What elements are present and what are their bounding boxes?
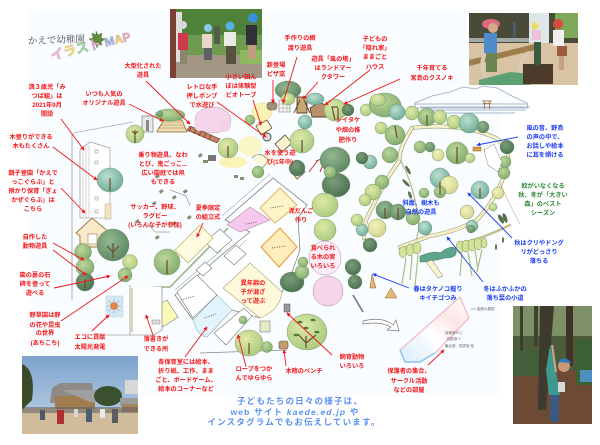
label: shiitake: や畑の推	[336, 126, 360, 134]
label: classroom corners: 折り紙、工作、まま	[158, 367, 214, 375]
gray tall lattice	[484, 144, 502, 172]
guardians room: 集会室・図書室 他	[445, 343, 474, 348]
blue and green labels	[402, 124, 568, 302]
forest paths	[364, 126, 520, 247]
label: soccer baseball rugby: サッカー、野球、	[130, 204, 180, 211]
label: parent-child clubs: 親子登園「かえで	[8, 170, 58, 177]
label: mixed age play: 子が混ざ	[241, 288, 266, 296]
label: rope swing: ロープをつか	[236, 366, 272, 373]
label: slope: 自然の遊具	[406, 208, 436, 216]
label: winter path: 落ち葉の小道	[486, 294, 524, 302]
pink tree	[194, 107, 231, 133]
label: hideout: ハウス	[366, 63, 384, 71]
label: winter path: 冬はふかふかの	[483, 286, 527, 293]
label: edible fruit: る木の実	[311, 253, 335, 261]
label: rope equipment: 手作りの綱	[285, 35, 315, 42]
label: rope equipment: 渡り遊具	[288, 44, 312, 52]
room: white classroom	[177, 275, 217, 318]
label: mixed age play: 異年齢の	[241, 280, 265, 287]
blue callout arrows	[373, 137, 518, 288]
label: spring bamboo shoots: キイチゴつみ	[419, 294, 457, 302]
label: wind tower: クタワー	[321, 73, 345, 81]
label: parent-child clubs: っこぐらぶ」と	[11, 179, 55, 186]
dark leaves	[401, 165, 509, 250]
left play yard outlines	[130, 285, 162, 335]
label: solar power: エコに貢献	[75, 334, 105, 341]
title	[28, 29, 132, 63]
footer message: 子どもたちの日々の様子は、	[237, 396, 363, 406]
label: wild grass garden: の世界	[36, 329, 55, 337]
label: guardians room: 保護者の集合、	[387, 368, 431, 375]
label: animals: 飼育動物	[340, 354, 364, 361]
room: small yellow	[153, 300, 178, 327]
gray house	[142, 116, 153, 132]
label: spring bamboo shoots: 春はタケノコ掘り	[413, 286, 463, 293]
label: climbing trees: 木もたくさん	[12, 142, 50, 150]
tan triangles	[370, 274, 397, 298]
gray arrow	[363, 319, 399, 331]
hideout house	[310, 102, 328, 117]
yellow patches	[252, 103, 272, 121]
main school building	[72, 122, 363, 353]
label: vehicles and jump rope: とび、鬼ごっこ...	[139, 160, 188, 168]
label: retro pump: で水遊び	[190, 101, 215, 109]
icon: maple leaf	[89, 31, 105, 48]
label: parent-child clubs: 預かり保育「ぎょ	[8, 187, 58, 195]
room notes: 保育室2Fに	[445, 330, 464, 335]
label: retro pump: 押しポンプ	[187, 92, 218, 100]
footer message: インスタグラムでもお伝えしています。	[207, 417, 381, 427]
bamboo grove	[370, 144, 509, 298]
label: bench: 木陰のベンチ	[285, 367, 323, 375]
label: summer pool: の組立式	[196, 213, 221, 221]
square frame	[290, 165, 305, 179]
label: classroom corners: 各保育室には絵本、	[158, 359, 214, 366]
west trees	[97, 168, 123, 192]
label: rope swing: んでゆらゆら	[236, 375, 272, 382]
room: yellow classroom	[260, 188, 297, 223]
label: vehicles and jump rope: 乗り物遊具、なわ	[138, 152, 188, 159]
hedge top	[275, 81, 301, 99]
swing	[309, 157, 327, 172]
label: Mitsuba class: 満３歳児「み	[28, 84, 66, 91]
edible fruit trees	[309, 241, 343, 306]
label: mud balls: 作り	[295, 216, 307, 224]
label: camphor tree: 千年育てる	[417, 65, 447, 72]
room: orange classroom	[261, 228, 297, 267]
large dark trees by the swings	[320, 147, 350, 173]
label: popular original equipment: オリジナル遊具	[82, 99, 126, 107]
label: graffiti place: 落書きが	[144, 336, 168, 343]
west building and hut	[76, 142, 111, 247]
mountain and torii: Miyajima	[414, 86, 530, 113]
label: shiitake: 肥作り	[339, 136, 357, 144]
label: biotope: 小さい田ん	[226, 74, 256, 81]
solar panel	[106, 296, 123, 317]
label: pizza oven: 新登場	[267, 62, 285, 69]
label: hideout: 「隠れ家」	[360, 44, 390, 52]
title: kindergarten name: かえで幼稚園	[28, 31, 85, 47]
label: forest sounds: に耳を傾ける	[526, 151, 564, 159]
label: self-made animal equipment: 自作した	[23, 234, 47, 241]
label: graffiti place: できる所	[144, 345, 169, 353]
label: guardians room: サークル活動	[391, 377, 427, 385]
label: slope: 斜面、樹木も	[402, 200, 440, 207]
pizza oven and net	[267, 102, 277, 110]
label: best season: 森」のベスト	[524, 200, 562, 208]
label: best season: 蚊がいなくなる	[521, 183, 565, 190]
label: stone monument: 碑を登って	[20, 280, 50, 288]
label: soccer baseball rugby: (いろんな子が参加)	[128, 221, 182, 229]
hut	[76, 218, 110, 247]
label: retro pump: レトロな手	[187, 84, 217, 91]
label: shiitake: シイタケ	[336, 117, 360, 124]
label: vehicles and jump rope: 広い園庭では凧	[141, 169, 185, 177]
title: illustrated map: イラスト MAP	[49, 29, 132, 63]
label: wind tower: はランドマー	[314, 65, 352, 72]
label: Mitsuba class: つば組」は	[32, 92, 62, 100]
label: animals: いろいろ	[340, 363, 364, 370]
guardians room	[400, 297, 495, 362]
label: summer pool: 夏季限定	[196, 205, 220, 212]
photo: child climbing tree in forest	[513, 306, 592, 424]
label: classroom corners: 絵本のコーナーなど	[158, 385, 215, 393]
room: pale yellow hall	[223, 263, 282, 318]
ground fence	[200, 350, 287, 353]
label: classroom corners: ごと、ボードゲーム、	[155, 376, 217, 384]
label: guardians room: などの部屋	[394, 386, 424, 394]
footer message	[207, 396, 381, 427]
label: vehicles and jump rope: もできる	[151, 179, 175, 186]
field tires	[135, 153, 244, 240]
playground equipment	[135, 97, 328, 349]
label: mud balls: 泥だんご	[289, 208, 313, 215]
green walkway	[130, 228, 228, 287]
guardians room: 相談室 2	[447, 336, 460, 341]
label: self-made animal equipment: 動物遊具	[23, 242, 47, 250]
label: popular original equipment: いつも人気の	[85, 91, 123, 98]
red callout arrows	[53, 57, 444, 367]
label: parent-child clubs: こちら	[24, 205, 42, 213]
icon: torii gate	[482, 101, 492, 109]
label: wind tower: 遊具「風の塔」	[311, 56, 355, 63]
label: hideout: ままごと	[363, 53, 387, 61]
label: best season: 秋、冬が「大きい	[518, 191, 568, 199]
pool	[175, 225, 213, 263]
photo: kindergarten building and running children	[22, 356, 138, 434]
label: wild grass garden: の花や昆虫	[30, 321, 60, 329]
label: autumn acorns: 秋はクリやドング	[514, 240, 564, 247]
label: climbing trees: 木登りができる	[9, 134, 53, 141]
label: stone monument: 園の裏の石	[20, 272, 50, 279]
label: forest sounds: 風の音、野鳥	[526, 125, 564, 132]
label: camphor tree: 宮島のクスノキ	[410, 74, 454, 82]
label: soccer baseball rugby: ラグビー	[143, 212, 167, 220]
label: stone monument: 遊べる	[26, 289, 44, 297]
label: best season: シーズン	[531, 209, 555, 217]
label: biotope: ぼは体験型	[226, 82, 256, 90]
label: water play: 水を使う遊	[265, 150, 295, 157]
outlines of wings	[175, 178, 307, 337]
label: solar power: 太陽光発電	[75, 343, 106, 351]
label: Mitsuba class: 開設	[41, 110, 54, 118]
leaf dabs on big tree	[294, 319, 320, 336]
label: edible fruit: いろいろ	[311, 263, 335, 270]
label: Mitsuba class: 2021年9月	[32, 101, 62, 109]
label: pizza oven: ピザ窯	[267, 70, 285, 78]
stump and animal hutch	[279, 341, 288, 349]
footer message: web サイト kaede.ed.jp や	[229, 407, 360, 417]
label: wild grass garden: 野草園は野	[30, 312, 60, 319]
corridor rooms	[196, 229, 246, 276]
tree trunks	[85, 107, 480, 354]
label: parent-child clubs: かぜぐらぶ」は	[11, 196, 55, 204]
label: autumn acorns: リがどっさり	[520, 248, 558, 256]
room: pink hall	[227, 207, 270, 232]
photo: children in rice paddy	[170, 9, 262, 78]
red labels	[8, 34, 454, 394]
label: autumn acorns: 落ちる	[530, 257, 548, 265]
label: mixed age play: って遊ぶ	[241, 297, 266, 305]
background wash	[28, 10, 500, 396]
label: biotope: ビオトープ	[226, 91, 257, 99]
label: large equipment: 遊具	[137, 71, 149, 79]
label: forest sounds: の声の中で、	[527, 133, 563, 141]
biotope and water play	[256, 120, 272, 135]
hedge north	[155, 109, 185, 121]
guardians room: 園舎の屋根	[477, 306, 495, 311]
label: hideout: 子どもの	[363, 36, 387, 43]
play structure wood	[157, 120, 187, 132]
room: blue classroom	[193, 295, 232, 337]
label: edible fruit: 食べられ	[311, 245, 335, 252]
tower	[294, 97, 310, 113]
label: water play: び(1年中)	[267, 158, 293, 166]
label: large equipment: 大型化された	[124, 63, 162, 70]
label: wild grass garden: (あちこち)	[31, 339, 59, 347]
south trees	[280, 272, 304, 292]
red bench	[187, 126, 220, 143]
trees and shrubs	[74, 81, 514, 356]
photo: children at water pump	[469, 13, 578, 85]
label: forest sounds: お話しや絵本	[526, 142, 564, 150]
